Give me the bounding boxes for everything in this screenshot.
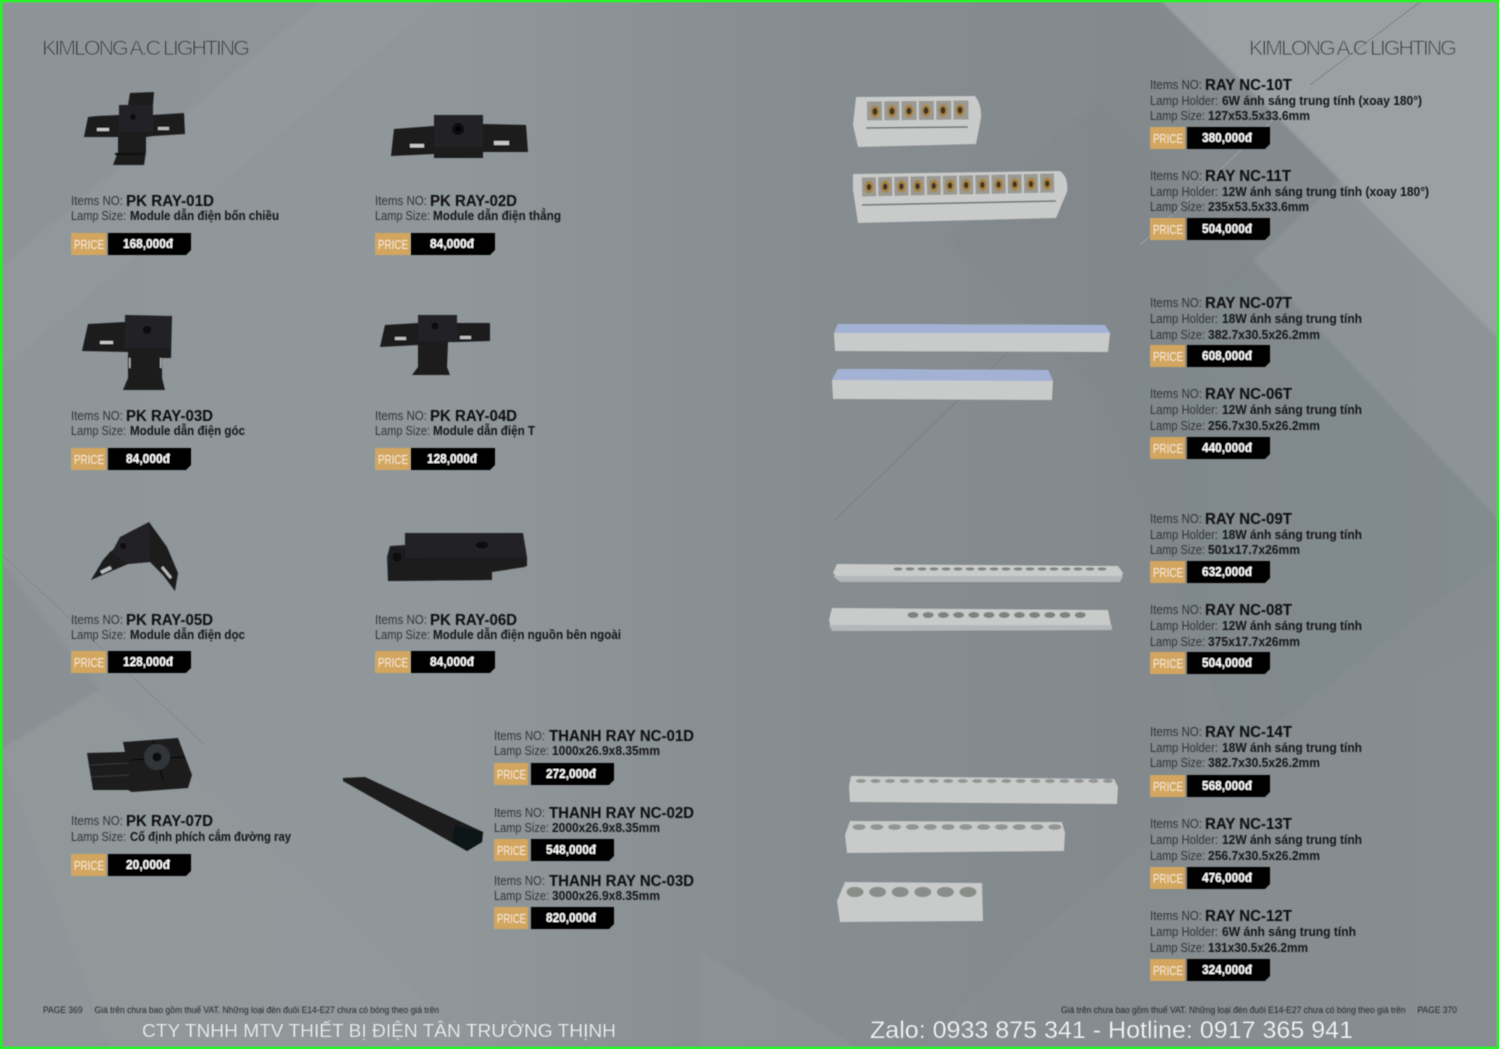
item: PK RAY-06D: 84,000đ [430,654,474,669]
item: PK RAY-06D [375,612,621,673]
item: PK RAY-04D: PK RAY-04D [430,408,517,425]
product image: PK RAY-02D [391,115,528,158]
item: RAY NC-07T: 382.7x30.5x26.2mm [1208,328,1320,342]
item: PK RAY-06D: Module dẫn điện nguồn bên ngoài [433,627,621,642]
item: RAY NC-10T [1150,77,1422,149]
item: PK RAY-05D: Lamp Size: [71,628,126,642]
item: THANH RAY NC-01D: 1000x26.9x8.35mm [552,744,660,758]
item: RAY NC-14T: Items NO: [1150,725,1202,739]
item: PK RAY-07D: Lamp Size: [71,830,126,844]
product image: RAY NC-12T [837,882,983,922]
item: RAY NC-08T: PRICE [1153,657,1183,671]
product image: PK RAY-06D [387,533,527,581]
item: PK RAY-02D: 84,000đ [430,236,474,251]
item: PK RAY-07D: Items NO: [71,814,123,828]
item: PK RAY-03D: Module dẫn điện góc [130,423,245,438]
item: PK RAY-01D: Module dẫn điện bốn chiều [130,208,279,223]
product image: RAY NC-11T [853,171,1067,223]
item: THANH RAY NC-02D: PRICE [497,844,526,858]
item: RAY NC-10T: 380,000đ [1202,130,1252,145]
item: RAY NC-07T: PRICE [1153,350,1183,364]
company name: CTY TNHH MTV THIẾT BỊ ĐIỆN TÂN TRƯỜNG THỊNH [142,1020,616,1041]
item: RAY NC-08T: Lamp Holder: [1150,619,1218,633]
item: RAY NC-13T: Items NO: [1150,817,1202,831]
item: PK RAY-03D: Lamp Size: [71,424,126,438]
item: THANH RAY NC-03D: 820,000đ [546,910,596,925]
item: RAY NC-07T: RAY NC-07T [1205,295,1292,312]
item: RAY NC-06T: 256.7x30.5x26.2mm [1208,419,1320,433]
item: THANH RAY NC-03D [494,873,694,929]
item: RAY NC-10T: Lamp Size: [1150,109,1205,123]
left brand heading: KIMLONG A.C LIGHTING [42,36,250,60]
item: PK RAY-05D [71,612,245,673]
item: PK RAY-02D: Items NO: [375,194,427,208]
item: RAY NC-11T: Items NO: [1150,169,1202,183]
item: RAY NC-12T: Items NO: [1150,909,1202,923]
item: RAY NC-11T: Lamp Holder: [1150,185,1218,199]
product image: RAY NC-07T [834,324,1110,352]
item: RAY NC-06T [1150,386,1362,459]
item: RAY NC-09T: 632,000đ [1202,564,1252,579]
product image: PK RAY-05D [91,522,178,591]
item: RAY NC-11T: 12W ánh sáng trung tính (xoay 180°) [1222,185,1429,199]
left page footer note: PAGE 369 Giá trên chưa bao gồm thuế VAT. Những loại đèn đuôi E14-E27 chưa có bóng theo giá trên [43,1005,439,1015]
item: RAY NC-13T: Lamp Holder: [1150,833,1218,847]
item: RAY NC-14T [1150,724,1362,797]
item: RAY NC-06T: 12W ánh sáng trung tính [1222,403,1362,417]
item: RAY NC-12T: 131x30.5x26.2mm [1208,941,1308,955]
item: RAY NC-08T: Items NO: [1150,603,1202,617]
item: RAY NC-14T: Lamp Size: [1150,756,1205,770]
item: PK RAY-02D: PRICE [378,238,408,252]
item: PK RAY-01D [71,193,279,255]
item: RAY NC-11T: 504,000đ [1202,221,1252,236]
item: PK RAY-05D: PRICE [74,656,104,670]
contact line: Zalo: 0933 875 341 - Hotline: 0917 365 941 [870,1017,1353,1044]
item: THANH RAY NC-03D: 3000x26.9x8.35mm [552,889,660,903]
item: RAY NC-14T: Lamp Holder: [1150,741,1218,755]
item: PK RAY-01D: PRICE [74,238,104,252]
item: PK RAY-07D [71,813,291,876]
item: PK RAY-06D: PRICE [378,656,408,670]
item: PK RAY-07D: PRICE [74,859,104,873]
item: RAY NC-10T: Items NO: [1150,78,1202,92]
item: RAY NC-11T: PRICE [1153,223,1183,237]
item: RAY NC-14T: 382.7x30.5x26.2mm [1208,756,1320,770]
item: RAY NC-13T [1150,816,1362,889]
item: RAY NC-12T: Lamp Size: [1150,941,1205,955]
item: PK RAY-03D: PRICE [74,453,104,467]
item: PK RAY-04D: Module dẫn điện T [433,423,535,438]
item: RAY NC-12T [1150,908,1356,981]
item: RAY NC-10T: RAY NC-10T [1205,77,1292,94]
item: PK RAY-07D: Cố định phích cắm đường ray [130,829,291,844]
item: PK RAY-01D: Lamp Size: [71,209,126,223]
item: PK RAY-01D: 168,000đ [123,236,173,251]
item: RAY NC-09T: PRICE [1153,566,1183,580]
item: RAY NC-10T: 6W ánh sáng trung tính (xoay 180°) [1222,94,1422,108]
item: PK RAY-01D: Items NO: [71,194,123,208]
item: RAY NC-07T: 18W ánh sáng trung tính [1222,312,1362,326]
item: RAY NC-08T: 375x17.7x26mm [1208,635,1300,649]
item: RAY NC-13T: RAY NC-13T [1205,816,1292,833]
item: RAY NC-10T: PRICE [1153,132,1183,146]
item: RAY NC-12T: 324,000đ [1202,962,1252,977]
item: THANH RAY NC-02D [494,805,694,861]
item: RAY NC-06T: RAY NC-06T [1205,386,1292,403]
item: RAY NC-13T: 12W ánh sáng trung tính [1222,833,1362,847]
item: PK RAY-03D: PK RAY-03D [126,408,213,425]
item: THANH RAY NC-01D: Items NO: [494,729,545,743]
product image: PK RAY-03D [82,315,172,390]
item: PK RAY-04D [375,408,535,470]
item: PK RAY-02D: Lamp Size: [375,209,430,223]
item: RAY NC-14T: 568,000đ [1202,778,1252,793]
item: RAY NC-11T: Lamp Size: [1150,200,1205,214]
right page footer note: Giá trên chưa bao gồm thuế VAT. Những loại đèn đuôi E14-E27 chưa có bóng theo giá trên PAGE 370 [1061,1005,1457,1015]
item: RAY NC-11T [1150,168,1429,240]
item: PK RAY-04D: Items NO: [375,409,427,423]
item: RAY NC-14T: PRICE [1153,780,1183,794]
item: RAY NC-09T [1150,511,1362,583]
item: RAY NC-11T: RAY NC-11T [1205,168,1291,185]
item: PK RAY-06D: Items NO: [375,613,427,627]
item: RAY NC-10T: 127x53.5x33.6mm [1208,109,1310,123]
item: RAY NC-07T: Lamp Holder: [1150,312,1218,326]
item: PK RAY-05D: 128,000đ [123,654,173,669]
product image: PK RAY-04D [380,315,490,375]
product image: RAY NC-10T [853,96,981,147]
item: RAY NC-08T: RAY NC-08T [1205,602,1292,619]
product image: RAY NC-09T [833,564,1123,582]
item: PK RAY-04D: 128,000đ [427,451,477,466]
item: RAY NC-08T [1150,602,1362,674]
item: RAY NC-08T: Lamp Size: [1150,635,1205,649]
right brand heading: KIMLONG A.C LIGHTING [1249,36,1457,60]
item: THANH RAY NC-03D: Items NO: [494,874,545,888]
item: RAY NC-13T: 256.7x30.5x26.2mm [1208,849,1320,863]
item: THANH RAY NC-03D: THANH RAY NC-03D [549,873,694,890]
item: PK RAY-02D [375,193,561,255]
item: RAY NC-06T: PRICE [1153,442,1183,456]
item: RAY NC-13T: PRICE [1153,872,1183,886]
item: RAY NC-09T: Items NO: [1150,512,1202,526]
product image: RAY NC-06T [832,369,1053,400]
item: RAY NC-12T: Lamp Holder: [1150,925,1218,939]
product image: RAY NC-13T [845,821,1065,853]
item: RAY NC-12T: RAY NC-12T [1205,908,1292,925]
item: RAY NC-07T: Items NO: [1150,296,1202,310]
item: RAY NC-08T: 12W ánh sáng trung tính [1222,619,1362,633]
item: PK RAY-06D: PK RAY-06D [430,612,517,629]
item: THANH RAY NC-01D: 272,000đ [546,766,596,781]
item: PK RAY-05D: Items NO: [71,613,123,627]
item: RAY NC-09T: 501x17.7x26mm [1208,543,1300,557]
item: RAY NC-11T: 235x53.5x33.6mm [1208,200,1309,214]
item: THANH RAY NC-02D: 548,000đ [546,842,596,857]
item: RAY NC-09T: Lamp Holder: [1150,528,1218,542]
product image: black track rail [343,777,483,851]
item: RAY NC-13T: Lamp Size: [1150,849,1205,863]
product image: PK RAY-07D [87,738,192,792]
item: RAY NC-12T: 6W ánh sáng trung tính [1222,925,1356,939]
item: RAY NC-07T: 608,000đ [1202,348,1252,363]
item: THANH RAY NC-02D: Lamp Size: [494,821,549,835]
item: THANH RAY NC-01D: THANH RAY NC-01D [549,728,694,745]
item: THANH RAY NC-03D: Lamp Size: [494,889,549,903]
item: THANH RAY NC-01D: PRICE [497,768,526,782]
item: THANH RAY NC-03D: PRICE [497,912,526,926]
item: RAY NC-06T: Lamp Size: [1150,419,1205,433]
item: THANH RAY NC-01D: Lamp Size: [494,744,549,758]
item: RAY NC-09T: Lamp Size: [1150,543,1205,557]
item: PK RAY-01D: PK RAY-01D [126,193,214,210]
item: RAY NC-13T: 476,000đ [1202,870,1252,885]
item: RAY NC-07T: Lamp Size: [1150,328,1205,342]
item: RAY NC-06T: 440,000đ [1202,440,1252,455]
item: THANH RAY NC-02D: THANH RAY NC-02D [549,805,694,822]
item: THANH RAY NC-01D [494,728,694,785]
item: RAY NC-06T: Items NO: [1150,387,1202,401]
item: PK RAY-03D: 84,000đ [126,451,170,466]
product image: RAY NC-08T [829,608,1112,631]
item: PK RAY-06D: Lamp Size: [375,628,430,642]
item: PK RAY-07D: PK RAY-07D [126,813,213,830]
item: THANH RAY NC-02D: 2000x26.9x8.35mm [552,821,660,835]
item: PK RAY-05D: Module dẫn điện dọc [130,627,245,642]
item: PK RAY-03D: Items NO: [71,409,123,423]
product image: RAY NC-14T [849,776,1118,804]
item: PK RAY-04D: PRICE [378,453,408,467]
item: RAY NC-08T: 504,000đ [1202,655,1252,670]
item: RAY NC-06T: Lamp Holder: [1150,403,1218,417]
item: RAY NC-14T: 18W ánh sáng trung tính [1222,741,1362,755]
item: RAY NC-09T: 18W ánh sáng trung tính [1222,528,1362,542]
item: PK RAY-02D: PK RAY-02D [430,193,517,210]
item: PK RAY-05D: PK RAY-05D [126,612,213,629]
item: RAY NC-10T: Lamp Holder: [1150,94,1218,108]
item: PK RAY-02D: Module dẫn điện thẳng [433,208,561,223]
item: RAY NC-09T: RAY NC-09T [1205,511,1292,528]
item: RAY NC-07T [1150,295,1362,367]
product image: PK RAY-01D [84,92,185,165]
item: RAY NC-14T: RAY NC-14T [1205,724,1292,741]
item: PK RAY-03D [71,408,245,470]
item: PK RAY-04D: Lamp Size: [375,424,430,438]
item: THANH RAY NC-02D: Items NO: [494,806,545,820]
item: RAY NC-12T: PRICE [1153,964,1183,978]
item: PK RAY-07D: 20,000đ [126,857,170,872]
